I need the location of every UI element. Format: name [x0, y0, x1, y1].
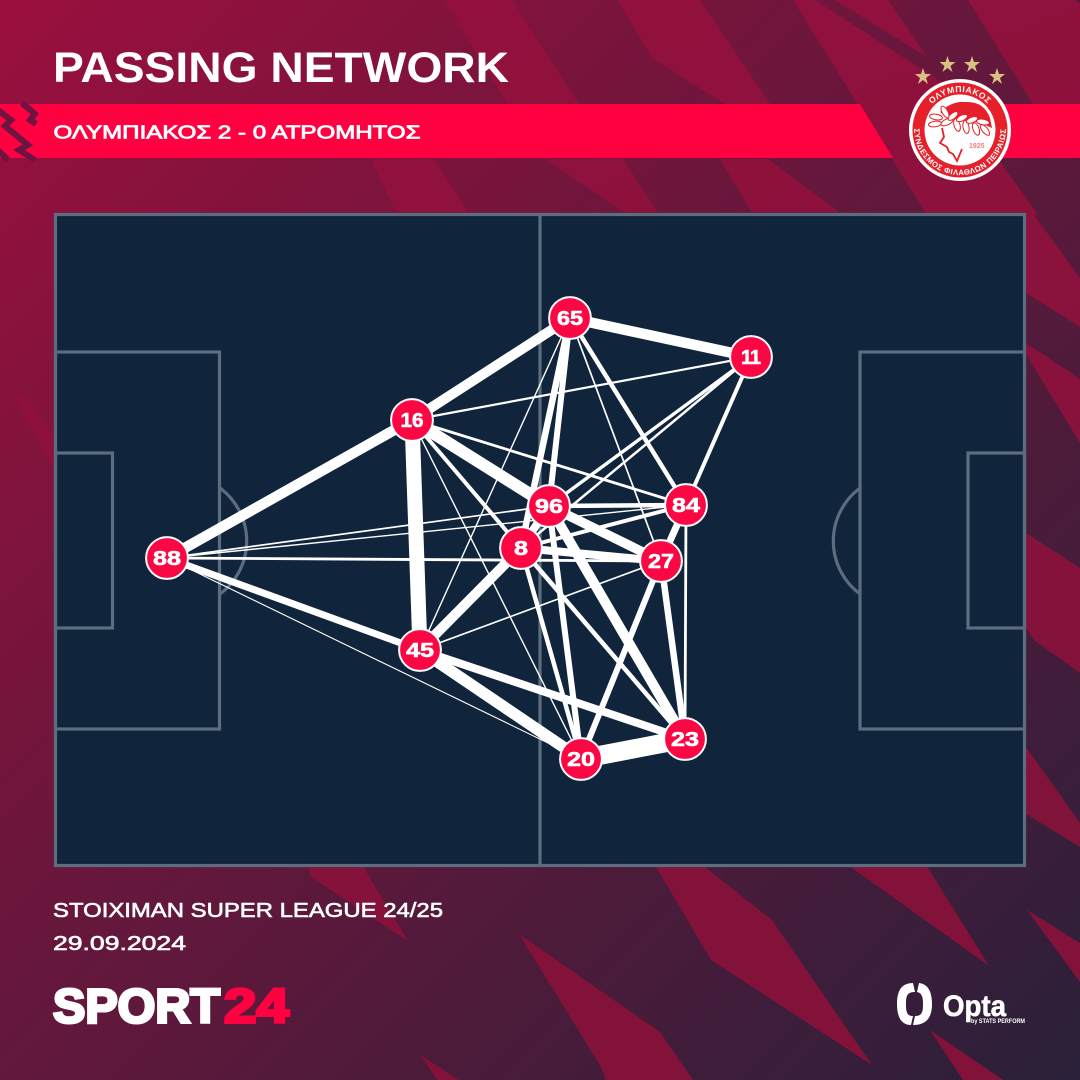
player 8: [500, 527, 542, 569]
player 8: 8: [514, 538, 528, 560]
player 65: 65: [557, 308, 583, 330]
player 20: 20: [567, 749, 595, 771]
icon: four stars: [915, 56, 1005, 84]
player 96: 96: [535, 496, 563, 518]
panel: football pitch: [56, 214, 1024, 866]
match date: 29.09.2024: [53, 933, 186, 955]
icon: Olympiacos crest: 1925: [969, 143, 985, 150]
title: PASSING NETWORK: [53, 45, 509, 92]
player 84: [665, 484, 707, 526]
icon: Olympiacos crest: [909, 79, 1011, 181]
logo: Opta by Stats Perform: Opta: [943, 990, 1006, 1023]
player 11: [730, 336, 772, 378]
logo: SPORT24: [53, 980, 289, 1034]
player 20: [560, 738, 602, 780]
player 84: 84: [672, 495, 701, 517]
player 88: [146, 537, 188, 579]
logo: SPORT24: 24: [224, 980, 289, 1034]
player 23: 23: [671, 729, 699, 751]
player 65: [549, 297, 591, 339]
match score subtitle: ΟΛΥΜΠΙΑΚΟΣ 2 - 0 ΑΤΡΟΜΗΤΟΣ: [54, 122, 420, 142]
player nodes: [146, 297, 772, 780]
player 88: 88: [153, 548, 181, 570]
player 45: [399, 629, 441, 671]
logo: Opta by Stats Perform: [897, 983, 1025, 1025]
logo: SPORT24: SPORT: [53, 980, 220, 1034]
icon: Olympiacos crest: ΣΥΝΔΕΣΜΟΣ ΦΙΛΑΘΛΩΝ ΠΕΙΡΑΙΩΣ: [914, 128, 1006, 176]
banner: [0, 103, 1080, 160]
player 23: [664, 718, 706, 760]
player 27: [640, 540, 682, 582]
player 16: [391, 399, 433, 441]
player 11: 11: [741, 347, 761, 369]
player 96: [528, 485, 570, 527]
player 27: 27: [648, 551, 674, 573]
icon: Olympiacos crest: ΟΛΥΜΠΙΑΚΟΣ: [929, 86, 992, 104]
player 45: 45: [406, 640, 434, 662]
logo: Opta by Stats Perform: by STATS PERFORM: [971, 1018, 1025, 1025]
player 16: 16: [400, 410, 424, 432]
passing network lines: [167, 318, 751, 759]
competition label: STOIXIMAN SUPER LEAGUE 24/25: [53, 900, 443, 922]
